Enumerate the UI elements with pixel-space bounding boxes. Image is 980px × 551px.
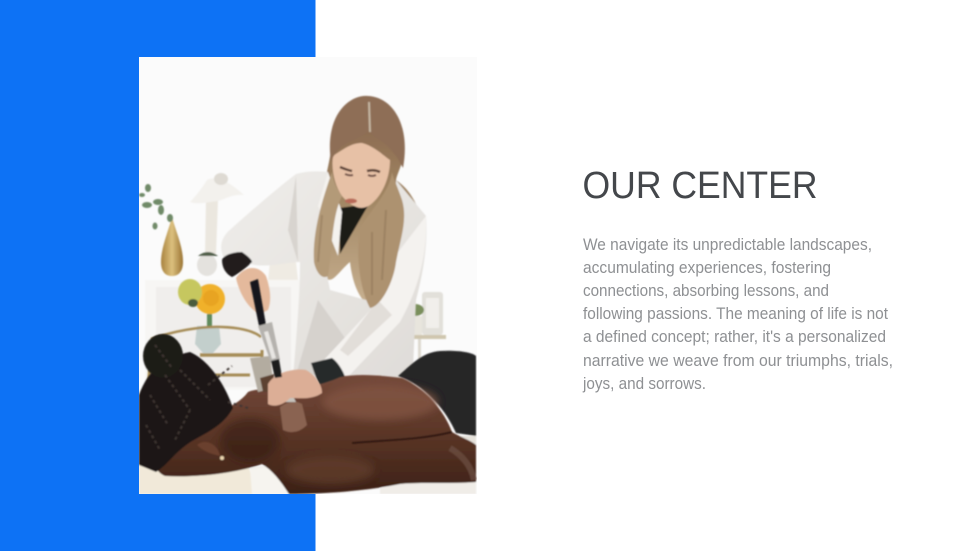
blue panel [0,0,316,551]
face [332,143,390,208]
pale yellow flowers [178,279,202,305]
lower hand [268,370,322,406]
white orchid stem and vase [205,200,218,254]
black undershirt [339,204,369,254]
body paragraph: following passions. The meaning of life is not [583,304,888,323]
title: OUR CENTER [582,165,818,207]
braided hair [139,352,233,472]
body paragraph: connections, absorbing lessons, and [583,281,829,300]
side table, plant and jar [422,292,443,335]
black shorts [398,351,476,436]
body paragraph: joys, and sorrows. [582,374,706,393]
left black cuff [222,252,252,277]
braid highlights [146,345,248,450]
cupping glass on back [280,402,307,432]
photo background wall [139,57,316,494]
body paragraph: accumulating experiences, fostering [583,258,831,277]
hair crown [330,96,405,168]
body paragraph: We navigate its unpredictable landscapes, [583,235,872,254]
arm crease [352,432,452,443]
white coat body [221,171,427,392]
white sheet [250,464,290,494]
hair bun [143,334,183,378]
coat fold shadows [288,176,298,262]
body paragraph: narrative we weave from our triumphs, trials, [583,351,893,370]
cupping glass behind [250,356,274,392]
gold vase [161,217,183,276]
neck shadow [220,418,280,462]
eyes and lips [340,167,380,172]
long hair behind [326,130,416,300]
coat sleeve [322,216,426,380]
gold table frame [151,327,261,339]
coat collar [318,172,342,256]
yellow rose [195,284,225,314]
photo: practitioner performing cupping massage [139,57,477,494]
flower stem and glass vase [207,314,212,332]
background decor: vases, flowers and table [139,173,446,395]
practitioner [221,96,427,393]
green leaves [139,184,173,230]
ear and earring [197,442,220,456]
bare back and arm [156,375,476,494]
front hair strands [314,172,342,277]
left hand [236,268,270,314]
back highlight [322,384,438,420]
pillow [139,465,252,494]
client lying on massage table [139,279,476,494]
wire decoration behind practitioner [268,262,298,280]
right black cuff [310,357,346,385]
massage torch tool [250,279,266,326]
body paragraph: a defined concept; rather, it's a personalized [583,327,886,346]
body paragraph [582,235,893,393]
